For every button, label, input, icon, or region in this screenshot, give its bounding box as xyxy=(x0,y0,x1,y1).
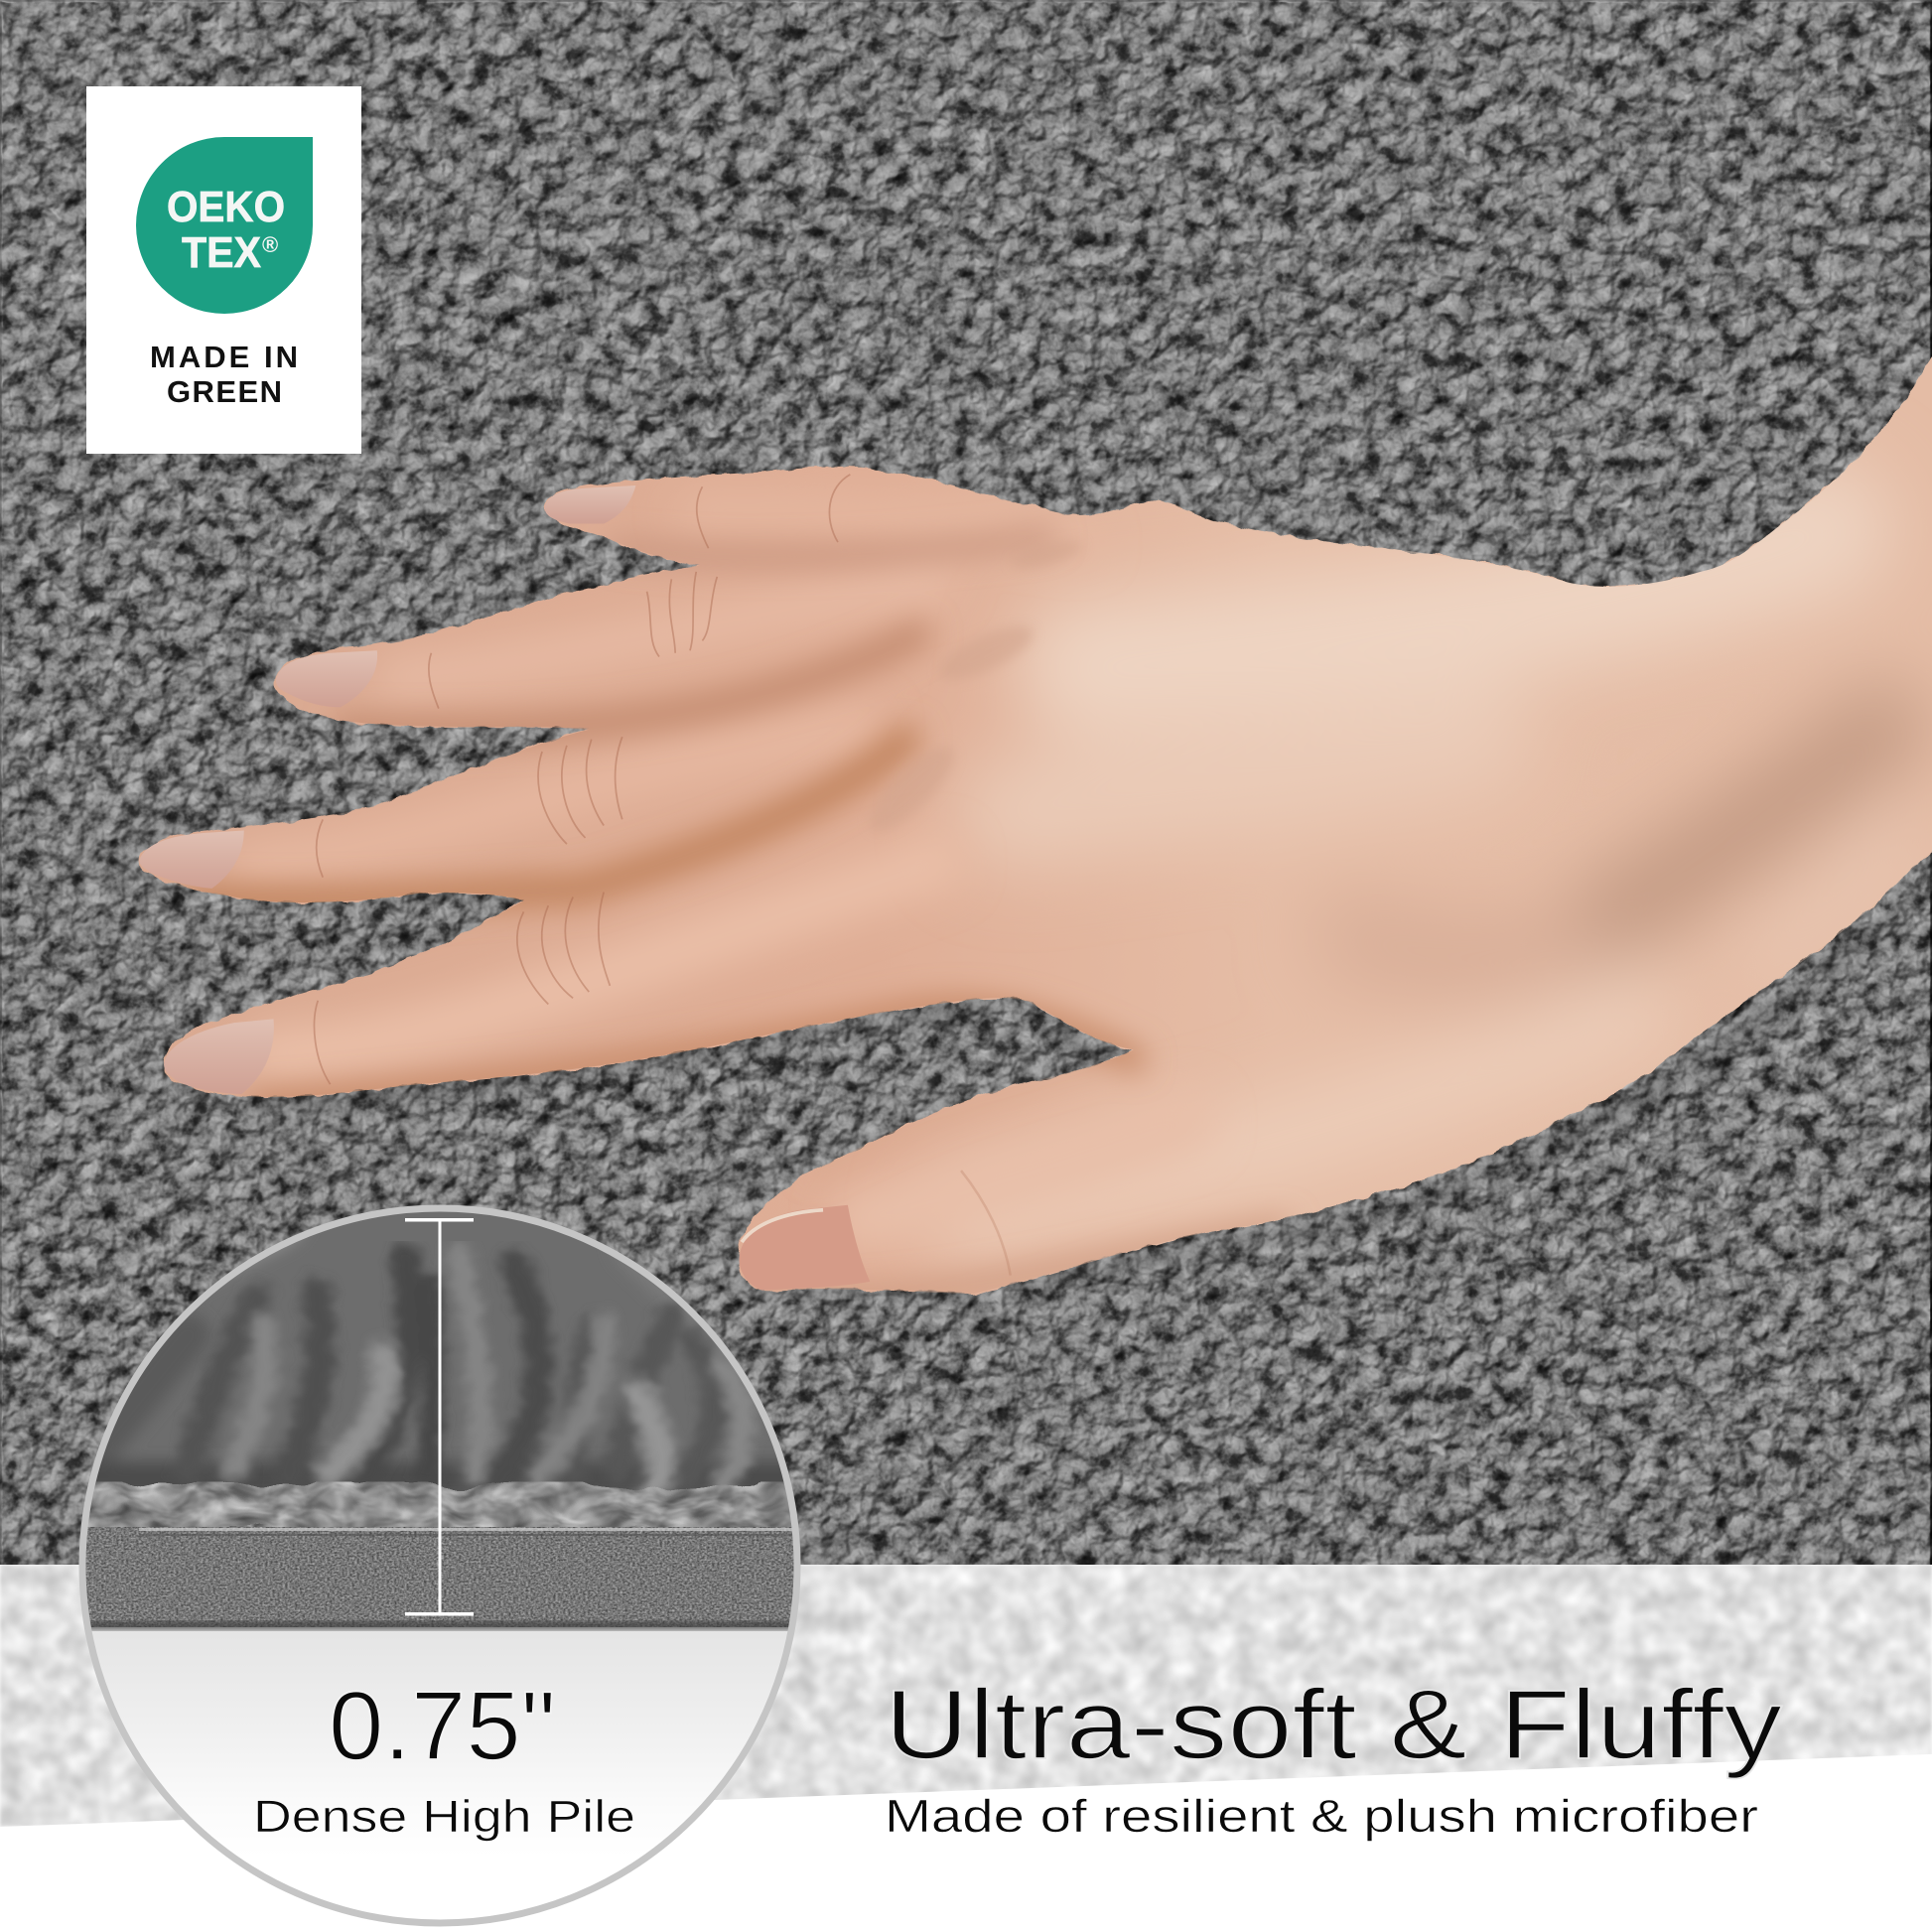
skin creases xyxy=(315,475,850,1084)
lens ring xyxy=(82,1208,797,1923)
woven rug backing xyxy=(79,1527,804,1630)
photo: hand resting on carpet xyxy=(139,296,1932,1302)
hand shading xyxy=(198,475,1897,1302)
shadow of hand pressed into carpet xyxy=(248,923,1886,1287)
thumb knuckle crease xyxy=(961,1171,1011,1276)
nail: thumb xyxy=(740,1205,870,1290)
dimension marker xyxy=(405,1218,474,1616)
hand silhouette xyxy=(139,296,1932,1294)
badge: OEKO-TEX xyxy=(86,86,361,454)
icon: green leaf drop xyxy=(136,137,313,314)
nail: pinky xyxy=(545,485,635,523)
nail: middle finger xyxy=(139,831,244,889)
registered mark: ® xyxy=(262,232,278,257)
pile fibres xyxy=(95,1211,784,1491)
logo word: OEKO: OEKO xyxy=(167,183,285,231)
lower white area xyxy=(97,1627,787,1819)
callout: magnified pile cross-section xyxy=(60,1200,834,1932)
badge caption line 2: GREEN xyxy=(167,374,282,409)
frayed pile base xyxy=(69,1484,814,1532)
measurement caption: Dense High Pile xyxy=(253,1791,635,1842)
measurement value: 0.75" xyxy=(329,1671,556,1780)
subheading: Made of resilient & plush microfiber xyxy=(885,1790,1758,1842)
heading: Ultra-soft & Fluffy xyxy=(885,1669,1783,1779)
nail: ring finger xyxy=(276,650,377,707)
badge caption line 1: MADE IN xyxy=(150,340,298,374)
logo word: TEX: TEX xyxy=(182,228,261,277)
nail: index finger xyxy=(164,1019,274,1094)
knuckle dimples xyxy=(879,544,1074,820)
band: light fluffy strip xyxy=(0,1565,1932,1827)
